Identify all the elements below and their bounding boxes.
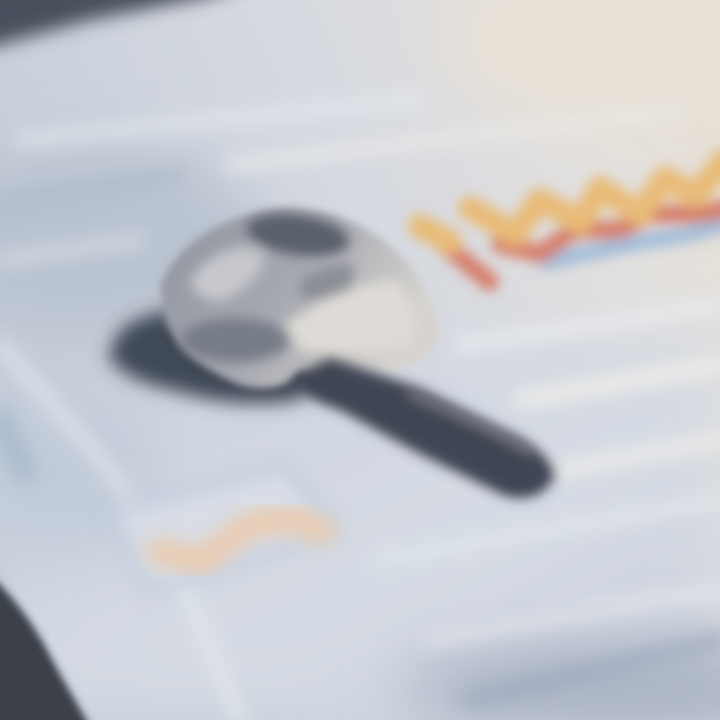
magnifying glass [108, 208, 554, 498]
dark band top left [0, 0, 250, 50]
dark object bottom left [0, 575, 92, 720]
glass shadow [108, 310, 320, 404]
peach zigzag [160, 518, 322, 562]
chart: amber trace [420, 160, 720, 242]
chart: blue trace [545, 222, 720, 262]
chart: red trace [445, 208, 720, 282]
glass head [160, 208, 440, 388]
bottom left card with peach zigzag [110, 465, 335, 590]
handle highlight [410, 394, 530, 452]
bar chart zigzag [420, 160, 720, 282]
card outline [110, 465, 335, 590]
lens highlights [180, 208, 415, 362]
handle [292, 358, 554, 498]
